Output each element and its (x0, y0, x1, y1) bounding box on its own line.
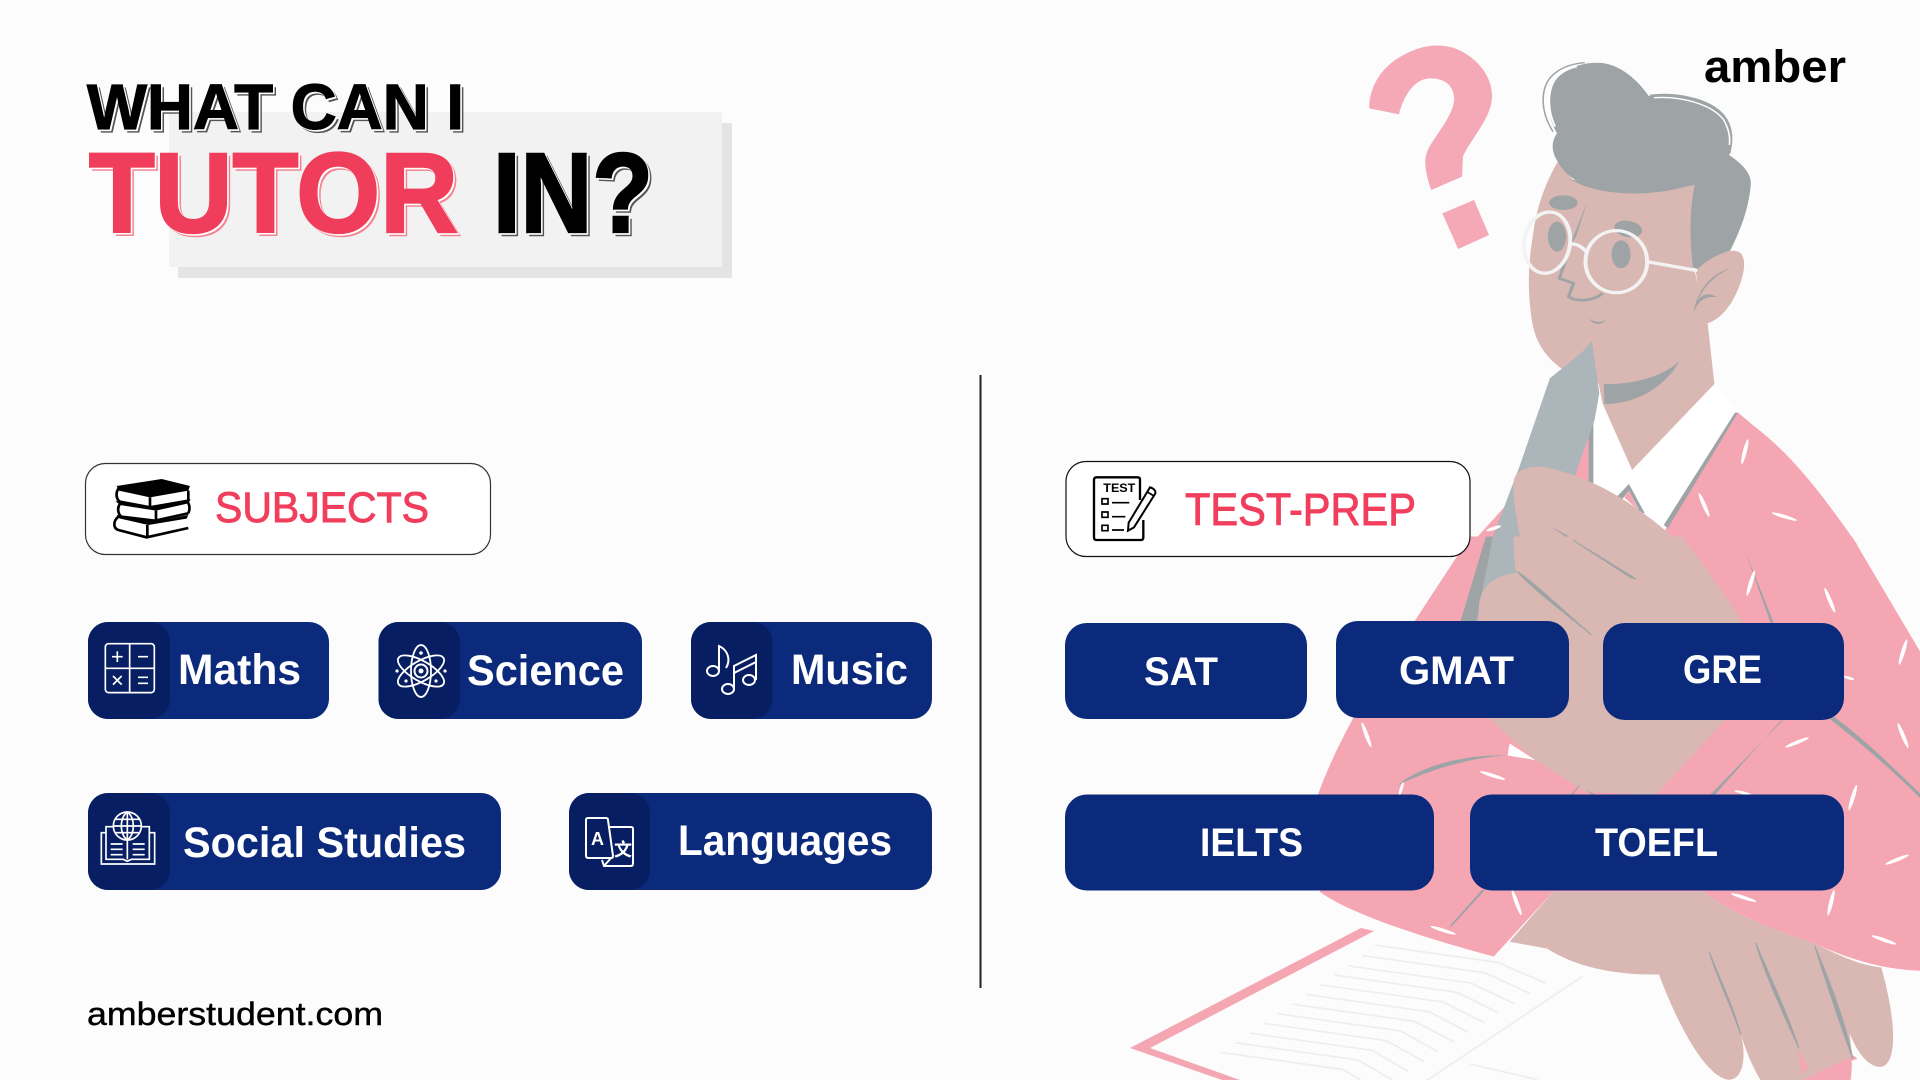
pill: gmat: GMAT (1399, 649, 1514, 693)
neck shadow (1604, 361, 1680, 404)
man: arms, sweater and hands (1318, 537, 1920, 1080)
pill: science: Science (467, 647, 624, 695)
pill: sat: SAT (1144, 650, 1218, 694)
man: head and upper body (1470, 63, 1858, 545)
pill: sat (1065, 623, 1307, 719)
finger lines (1709, 943, 1853, 1059)
hair highlights (1543, 63, 1585, 132)
lower hand (1510, 892, 1893, 1080)
pill: gre (1603, 623, 1844, 720)
icon: test paper and pencil (1094, 477, 1155, 540)
hand holding pencil (1479, 537, 1743, 795)
icon: music notes (707, 646, 756, 694)
website url: amberstudent.com (87, 996, 383, 1032)
pencil lower part (1460, 537, 1517, 623)
pencil (1490, 341, 1599, 545)
pill: toefl: TOEFL (1595, 821, 1718, 865)
subjects heading: SUBJECTS (215, 484, 429, 532)
eyes (1548, 222, 1566, 252)
pill: ielts (1065, 794, 1434, 890)
pill: science (378, 622, 642, 719)
nose (1559, 201, 1602, 300)
pill: gmat (1336, 621, 1569, 718)
collar shadow lines (1589, 413, 1738, 528)
icon: test paper and pencil: TEST (1103, 481, 1136, 495)
sweater flecks (1360, 570, 1910, 946)
logo: amber: amber (1704, 41, 1846, 92)
title panel with offset shadow (169, 112, 732, 278)
hair (1549, 63, 1751, 269)
test-prep heading (1066, 462, 1470, 556)
hand upper part (1513, 467, 1682, 545)
pill: languages (569, 793, 932, 890)
sweater (1318, 537, 1920, 971)
hand lines (1517, 540, 1636, 635)
pill: social studies: Social Studies (183, 819, 466, 867)
sweater upper right and left (1470, 413, 1858, 545)
title: in?: IN? (493, 130, 653, 256)
paper on desk (1130, 928, 1583, 1080)
illustration: thinking man with question mark (1130, 45, 1920, 1080)
face and neck (1529, 162, 1714, 470)
icon: calculator (105, 644, 154, 693)
collar (1593, 383, 1738, 528)
pill: languages: Languages (678, 817, 892, 865)
icon: stack of books (114, 479, 191, 537)
test-prep heading: TEST-PREP (1185, 484, 1416, 535)
divider (980, 375, 982, 988)
question mark (1369, 45, 1492, 249)
ear (1695, 251, 1744, 324)
icon: translation cards: A (591, 829, 604, 849)
sweater fold lines (1397, 550, 1920, 928)
eyebrows (1549, 195, 1578, 210)
upper sweater flecks (1486, 439, 1798, 532)
title: tutor: TUTOR (89, 130, 458, 256)
pill: ielts: IELTS (1200, 821, 1303, 865)
pill: music (691, 622, 932, 719)
glasses (1521, 210, 1697, 293)
icon: globe over book (101, 812, 155, 864)
pill: music: Music (791, 646, 908, 694)
forehead crease (1569, 178, 1695, 193)
pill: gre: GRE (1683, 648, 1762, 692)
ear lines (1693, 268, 1731, 313)
pill: social studies (88, 793, 501, 890)
pill: maths: Maths (178, 646, 301, 694)
icon: atom (393, 645, 449, 697)
finger notch (1798, 1050, 1858, 1080)
subjects heading (86, 464, 490, 554)
pill: maths (88, 622, 329, 719)
icon: translation cards (586, 818, 633, 866)
icon: translation cards: 文 (614, 839, 632, 860)
pill: toefl (1470, 794, 1844, 890)
title: what can i: WHAT CAN I (87, 71, 464, 143)
chin dimple (1589, 318, 1606, 324)
